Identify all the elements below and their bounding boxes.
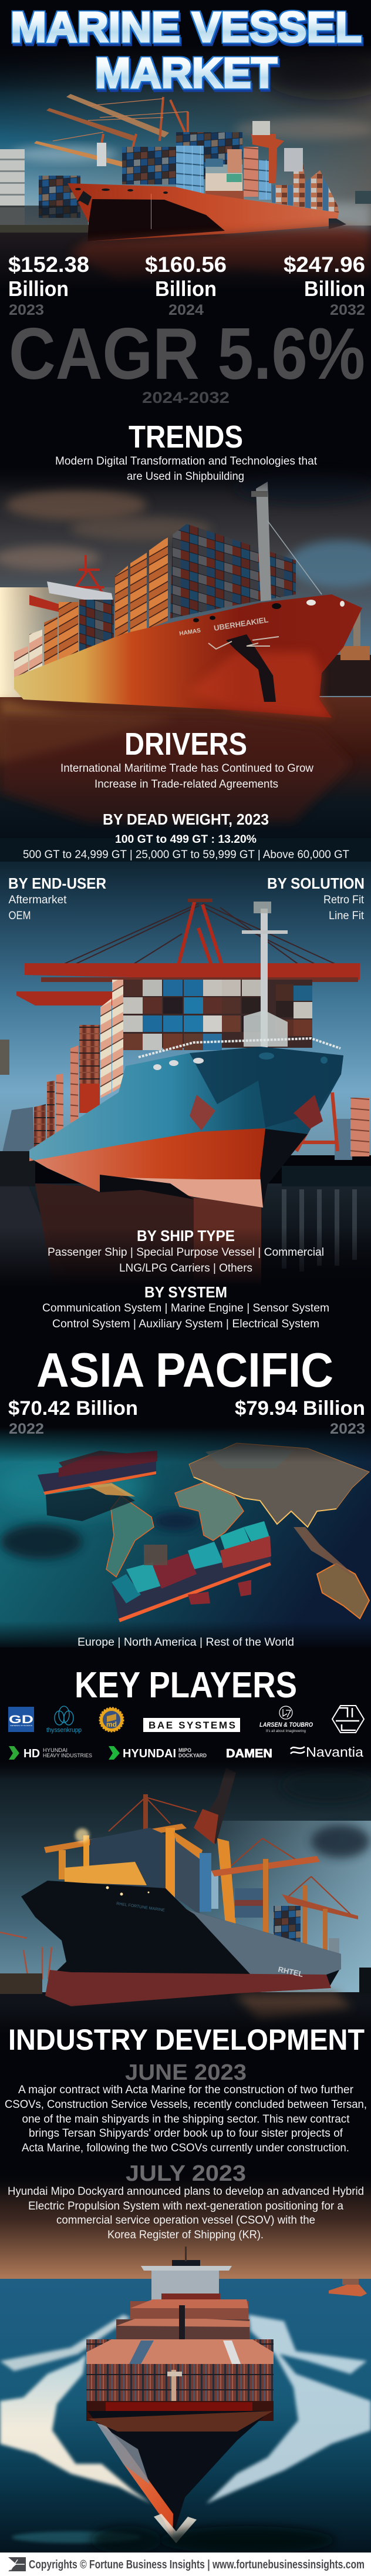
icon: Fortune Business Insights logo: [8, 2557, 26, 2571]
stat: asia pacific 2022: [8, 1397, 138, 1437]
segment: by end-user: [8, 875, 106, 922]
development: June 2023: [5, 2060, 367, 2154]
segment: by system: Control System | Auxiliary System | Electrical System: [52, 1317, 319, 1330]
image: ship bow at sunset: UBERHEAKIEL: [213, 615, 269, 633]
hero image: container ship at port: [0, 46, 371, 300]
stat: 2023 market size: Billion: [8, 277, 69, 301]
segment: by solution: Retro Fit: [323, 893, 365, 906]
development: July 2023: Electric Propulsion System with next-generation positioning for a: [28, 2200, 343, 2212]
segment: by dead weight: [23, 811, 349, 861]
development: June 2023: Acta Marine, following the two CSOVs currently under construction.: [22, 2142, 349, 2154]
logo: Larsen and Toubro: LARSEN & TOUBRO: [259, 1721, 313, 1728]
segment: by solution: [267, 875, 365, 922]
stat: 2032 market size: $247.96: [284, 253, 365, 277]
CAGR headline: 2024-2032: [142, 389, 230, 406]
asia pacific heading: ASIA PACIFIC: [36, 1343, 333, 1397]
logo: Navantia: Navantia: [306, 1744, 363, 1760]
segment: by dead weight: 500 GT to 24,999 GT | 25,000 GT to 59,999 GT | Above 60,000 GT: [23, 848, 349, 861]
logo: thyssenkrupp: thyssenkrupp: [46, 1727, 82, 1734]
stat: 2032 market size: Billion: [304, 277, 365, 301]
logo: Hyundai Mipo Dockyard: HYUNDAI: [123, 1747, 176, 1760]
segment: by system: Communication System | Marine Engine | Sensor System: [42, 1302, 329, 1314]
image: ship bow at sunset: [0, 464, 371, 840]
logo: BAE Systems: BAE SYSTEMS: [149, 1720, 235, 1731]
stat: 2023 market size: 2023: [9, 302, 44, 318]
development: June 2023: A major contract with Acta Marine for the construction of two further: [18, 2084, 354, 2096]
development: June 2023: brings Tersan Shipyards' order book up to four sister projects of: [29, 2127, 343, 2140]
logo: Mazagon Dock: [100, 1708, 123, 1731]
logo: Larsen and Toubro: It's all about Imagineering: [266, 1730, 306, 1733]
title: MARINE VESSEL: [11, 4, 362, 51]
stat: asia pacific 2023: $79.94 Billion: [235, 1397, 365, 1420]
stat: 2024 market size: $160.56: [145, 253, 227, 277]
footer: [0, 2553, 371, 2576]
development: June 2023: JUNE 2023: [125, 2060, 247, 2085]
logo: Hyundai Mipo Dockyard: MIPO: [178, 1747, 191, 1753]
image: ship at dusk with lit cranes: [0, 1762, 371, 2035]
title: [11, 4, 362, 97]
stat: 2023 market size: $152.38: [8, 253, 89, 277]
logo: General Dynamics: [8, 1707, 34, 1732]
trends heading: [55, 419, 318, 483]
image: ship at dusk with lit cranes: RHEL FORTUNE MARINE: [116, 1902, 165, 1913]
image: container ship bow with gantry crane: [0, 838, 371, 1286]
stat: asia pacific 2023: [235, 1397, 365, 1437]
key players heading: KEY PLAYERS: [75, 1665, 297, 1706]
segment: by solution: Line Fit: [329, 909, 365, 922]
segment: by end-user: Aftermarket: [8, 893, 67, 906]
logo: General Dynamics: GENERAL DYNAMICS: [10, 1724, 32, 1727]
drivers heading: [60, 727, 314, 791]
logo: General Dynamics: GD: [9, 1714, 33, 1726]
title: MARKET: [95, 50, 277, 97]
segment: by end-user: OEM: [8, 909, 31, 922]
development: July 2023: JULY 2023: [126, 2161, 246, 2186]
development: July 2023: Hyundai Mipo Dockyard announced plans to develop an advanced Hybrid: [8, 2185, 364, 2198]
segment: by ship type: Passenger Ship | Special Purpose Vessel | Commercial: [48, 1246, 324, 1259]
segment: by ship type: BY SHIP TYPE: [137, 1227, 235, 1245]
stat: asia pacific 2022: $70.42 Billion: [8, 1397, 138, 1420]
stat: asia pacific 2022: 2022: [9, 1421, 44, 1437]
logo: Hyundai Mipo Dockyard: DOCKYARD: [178, 1753, 207, 1758]
stat: 2032 market size: [284, 253, 365, 318]
development: July 2023: commercial service operation vessel (CSOV) with the: [56, 2214, 315, 2227]
other regions list: Europe | North America | Rest of the World: [77, 1636, 294, 1649]
segment: by end-user: BY END-USER: [8, 875, 106, 892]
logo: Hyundai Mipo Dockyard: [109, 1746, 207, 1760]
logo: thyssenkrupp: [46, 1706, 82, 1734]
image: ship at dusk with lit cranes: RHTEL: [277, 1965, 304, 1979]
trends heading: are Used in Shipbuilding: [127, 470, 244, 483]
segment: by system: BY SYSTEM: [144, 1283, 227, 1301]
image: world map with ships: [0, 1427, 371, 1650]
stat: 2024 market size: [145, 253, 227, 318]
logo: HD Hyundai Heavy Industries: HEAVY INDUSTRIES: [43, 1753, 92, 1758]
drivers heading: DRIVERS: [124, 727, 247, 762]
stat: 2023 market size: [8, 253, 89, 318]
trends heading: TRENDS: [129, 419, 243, 455]
segment: by dead weight: 100 GT to 499 GT : 13.20%: [115, 833, 257, 846]
logo: HD Hyundai Heavy Industries: HYUNDAI: [43, 1747, 68, 1753]
segment: by system: [42, 1283, 329, 1330]
image: ship bow at sunset: HAMAS: [179, 627, 201, 637]
logo: HD Hyundai Heavy Industries: HD: [23, 1747, 40, 1760]
development: June 2023: one of the main shipyards in the shipping sector. This new contract: [22, 2113, 350, 2126]
stat: 2024 market size: 2024: [168, 302, 204, 318]
logo: hexagon shipyard: [332, 1706, 364, 1733]
stat: 2024 market size: Billion: [155, 277, 217, 301]
development: July 2023: [8, 2161, 364, 2241]
logo: Larsen and Toubro: [259, 1706, 313, 1733]
development: July 2023: Korea Register of Shipping (KR).: [107, 2229, 264, 2241]
trends heading: Modern Digital Transformation and Technologies that: [55, 455, 318, 468]
logo: Damen: DAMEN: [226, 1747, 272, 1760]
image: ship at open sea with wake: [0, 2173, 371, 2554]
logo: HD Hyundai Heavy Industries: [9, 1746, 92, 1760]
segment: by dead weight: BY DEAD WEIGHT, 2023: [103, 811, 269, 828]
drivers heading: International Maritime Trade has Continued to Grow: [60, 762, 314, 775]
development: June 2023: CSOVs, Construction Service Vessels, recently concluded between Tersan,: [5, 2099, 367, 2111]
logo: Mazagon Dock: md: [106, 1720, 117, 1728]
stat: asia pacific 2023: 2023: [330, 1421, 365, 1437]
segment: by solution: BY SOLUTION: [267, 875, 365, 892]
segment: by ship type: [48, 1227, 324, 1274]
stat: 2032 market size: 2032: [330, 302, 365, 318]
segment: by ship type: LNG/LPG Carriers | Others: [119, 1262, 252, 1274]
drivers heading: Increase in Trade-related Agreements: [95, 778, 278, 791]
